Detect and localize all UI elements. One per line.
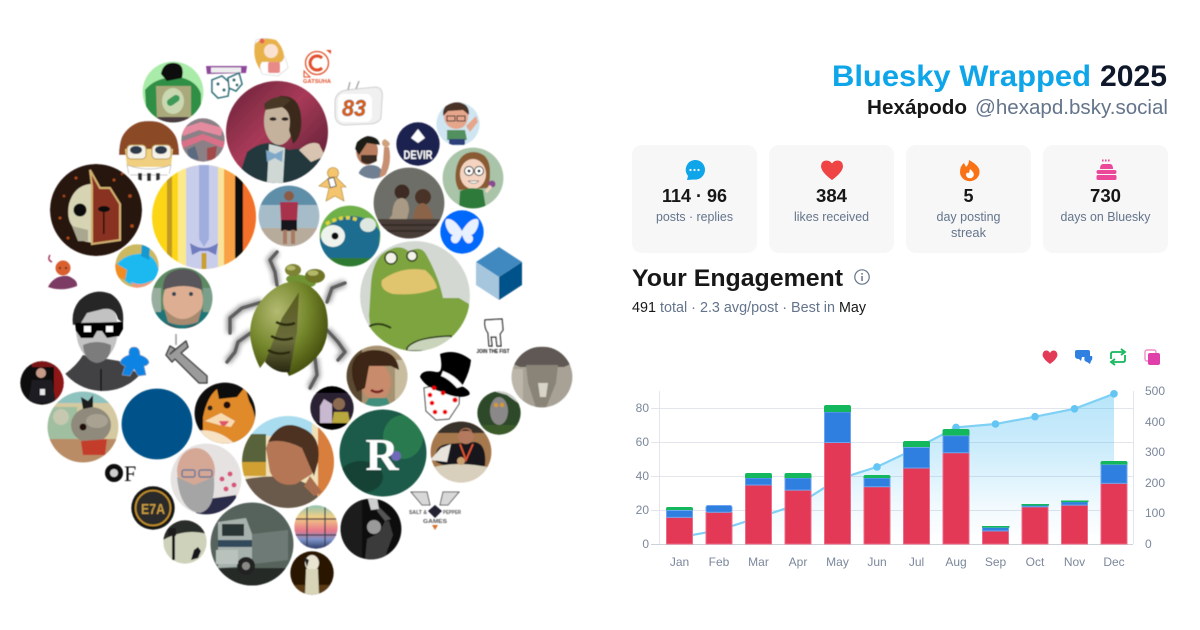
icon: blue meeple	[120, 347, 149, 376]
avatar: man with beanie	[151, 267, 213, 330]
month labels: Jun	[867, 555, 887, 569]
stat value: 5	[963, 186, 974, 206]
sticker: anime girl	[254, 38, 288, 76]
display name: Hexápodo	[867, 97, 967, 119]
avatar: truck	[210, 502, 294, 586]
logo: OF: F	[124, 461, 136, 486]
month labels: Oct	[1026, 555, 1045, 569]
right axis labels: 200	[1145, 476, 1165, 490]
legend icon: replies	[1075, 350, 1092, 364]
title: 2025	[1100, 60, 1167, 93]
panel: days on Bluesky	[1043, 145, 1168, 253]
logo: salt and pepper games: GAMES	[423, 519, 447, 525]
avatar: TV 83 sticker	[335, 81, 382, 125]
sticker: glasses guy	[436, 102, 480, 146]
avatar: frog	[360, 241, 470, 351]
stat label: posts · replies	[656, 209, 733, 224]
month labels: Nov	[1064, 555, 1085, 569]
chart legend	[1042, 349, 1160, 365]
month labels: Mar	[748, 555, 769, 569]
avatar: mudkip	[115, 242, 159, 288]
logo: OF	[105, 461, 136, 486]
icon: cake	[1096, 160, 1116, 180]
avatar: solid blue	[122, 389, 192, 459]
avatar bubble cloud	[20, 38, 573, 595]
engagement summary: total · 2.3 avg/post · Best in	[660, 300, 835, 316]
month labels: Aug	[945, 555, 967, 569]
icon: pixel sword	[166, 334, 207, 383]
avatar: fox	[194, 382, 256, 444]
right axis labels: 500	[1145, 384, 1165, 398]
right axis labels: 300	[1145, 445, 1165, 459]
avatar: pug painting	[47, 391, 119, 463]
logo: salt and pepper games	[409, 492, 461, 530]
avatar: sword painting	[152, 165, 256, 269]
avatar: owl	[477, 391, 521, 435]
month labels: Jul	[909, 555, 924, 569]
avatar: TV 83 sticker: 83	[342, 95, 366, 121]
icon: flame	[960, 160, 980, 181]
stacked bars: replies	[666, 412, 1127, 531]
avatar: curly haired woman	[346, 345, 409, 407]
logo: dice with banner	[206, 66, 247, 98]
avatar: grey wizard	[511, 346, 573, 409]
legend icon: likes	[1042, 350, 1058, 364]
cumulative area	[680, 394, 1114, 544]
logo: salt and pepper games: SALT &	[409, 510, 427, 516]
stat value: 384	[816, 186, 847, 206]
panel: posts and replies	[632, 145, 757, 253]
avatar: pink crowd	[181, 118, 225, 162]
logo: Gatsuha: GATSUHA	[303, 79, 331, 85]
avatar: gothic R: R	[365, 429, 399, 480]
left axis labels	[636, 401, 649, 551]
logo: salt and pepper games: PEPPER	[443, 510, 461, 516]
avatar: man with pixel sunglasses	[64, 290, 139, 392]
stat value: 730	[1090, 186, 1121, 206]
month labels: Sep	[985, 555, 1006, 569]
avatar: phone man	[20, 361, 66, 405]
avatar: blue creature	[319, 205, 381, 268]
avatar: man with cards	[430, 421, 492, 483]
stat label: days on Bluesky	[1060, 209, 1151, 224]
left axis labels: 0	[642, 537, 649, 551]
logo: Gatsuha	[303, 50, 331, 85]
avatar: dog and man	[310, 386, 354, 430]
left axis labels: 40	[636, 469, 649, 483]
month labels: Feb	[709, 555, 730, 569]
month labels: Apr	[789, 555, 807, 569]
avatar: E7A badge	[131, 486, 175, 530]
avatar: bearded man	[170, 443, 242, 515]
handle: @hexapd.bsky.social	[975, 97, 1168, 119]
avatar: skull and red mask	[50, 164, 142, 256]
stat value: 114 · 96	[662, 186, 727, 206]
right axis labels: 100	[1145, 506, 1165, 520]
cumulative line	[676, 390, 1118, 541]
avatar: man with hand to chin	[354, 135, 391, 180]
beetle	[227, 252, 345, 388]
avatar: Devir: DEVIR	[404, 150, 433, 162]
stat label second line: streak	[951, 225, 986, 240]
engagement summary: May	[839, 300, 867, 316]
avatar: green haired woman	[442, 147, 504, 209]
month labels: Jan	[670, 555, 689, 569]
sticker: pumpkin creature	[48, 255, 77, 289]
grid lines	[651, 391, 1134, 544]
sticker: gingerbread	[319, 168, 346, 201]
title: Bluesky Wrapped	[832, 60, 1091, 93]
stacked bars: reposts	[666, 405, 1128, 528]
month labels: May	[826, 555, 849, 569]
avatar: glasses character	[118, 120, 180, 182]
right axis labels: 400	[1145, 415, 1165, 429]
left axis labels: 20	[636, 503, 649, 517]
legend icon: quotes	[1145, 350, 1160, 365]
avatar: large portrait man	[225, 80, 329, 184]
avatar: top hat die	[420, 352, 471, 420]
avatar: black and white figure	[340, 498, 402, 560]
logo: join the fist	[476, 319, 510, 355]
left axis labels: 60	[636, 435, 649, 449]
avatar: gothic R	[339, 409, 427, 497]
icon: info	[855, 270, 869, 284]
stacked bars: likes	[666, 442, 1127, 544]
avatar: Devir	[396, 122, 440, 166]
avatar: green jacket	[142, 61, 204, 123]
avatar: sunset window	[294, 505, 338, 549]
engagement summary: 491	[632, 300, 656, 316]
month labels: Dec	[1103, 555, 1125, 569]
right axis labels	[1145, 384, 1165, 551]
left axis labels: 80	[636, 401, 649, 415]
icon: speech bubble	[686, 160, 705, 180]
avatar: children on roof	[373, 167, 445, 239]
avatar: E7A badge: E7A	[141, 501, 165, 518]
month labels	[670, 555, 1125, 569]
heading: Your Engagement: Your Engagement	[632, 265, 843, 292]
logo: join the fist: JOIN THE FIST	[476, 349, 510, 355]
panel: likes received	[769, 145, 894, 253]
avatar: man on beach	[258, 185, 320, 248]
avatar: silhouette	[163, 520, 207, 564]
icon: heart	[821, 160, 843, 180]
engagement chart	[636, 384, 1165, 569]
avatar: man in profile	[242, 416, 334, 508]
right axis labels: 0	[1145, 537, 1152, 551]
stat label: likes received	[794, 209, 869, 224]
avatar: Bluesky butterfly	[440, 210, 484, 254]
stat label: day posting	[936, 209, 1000, 224]
logo: isometric cube	[476, 247, 522, 300]
avatar: white dog	[290, 551, 334, 595]
panel: day posting streak	[906, 145, 1031, 253]
legend icon: reposts	[1111, 349, 1125, 365]
